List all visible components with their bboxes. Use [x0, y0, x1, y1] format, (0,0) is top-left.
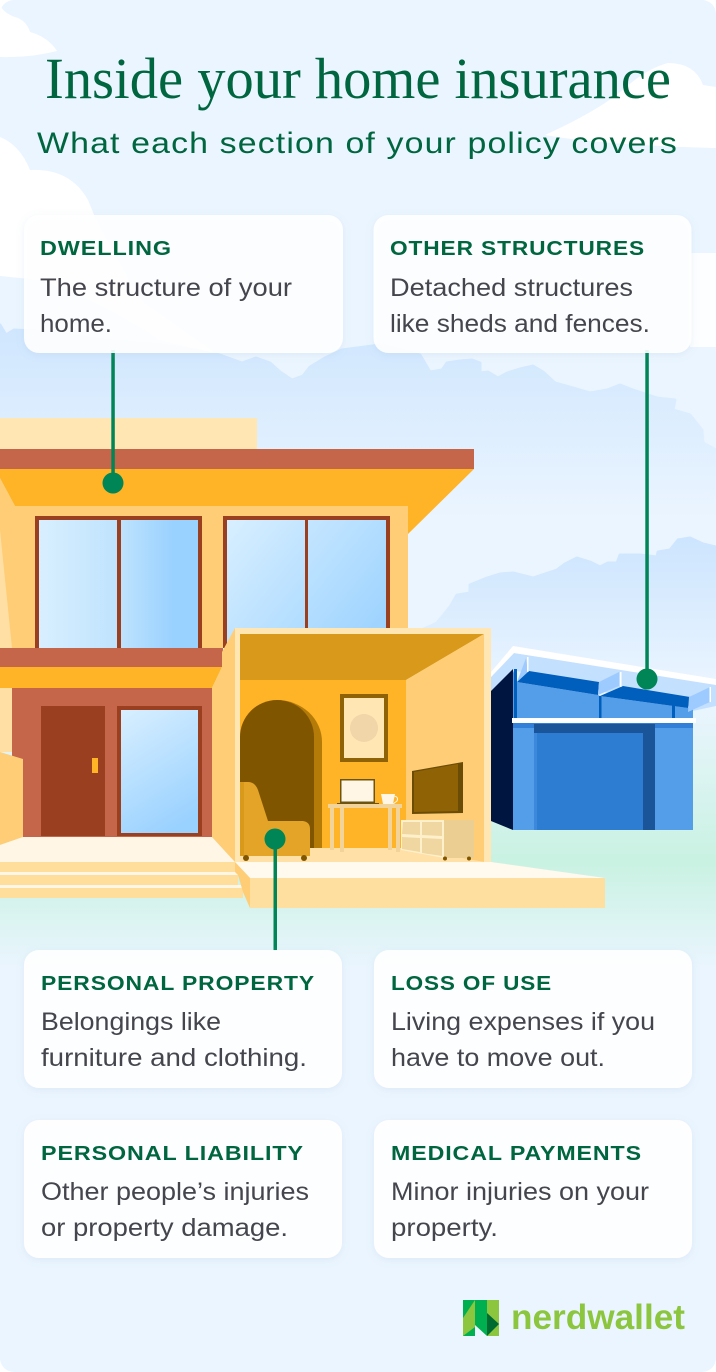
heading: other structures: OTHER STRUCTURES — [390, 237, 645, 260]
panel: personal liability — [24, 1120, 342, 1258]
cloud: far right — [690, 253, 716, 347]
cloud: top left — [0, 5, 57, 57]
television — [412, 762, 463, 814]
lower window — [117, 706, 202, 836]
left side wall upper — [0, 478, 15, 648]
upper right window — [223, 516, 390, 648]
house — [0, 418, 605, 908]
text: loss of use: have to move out. — [391, 1044, 605, 1072]
floor — [240, 848, 484, 862]
steps — [0, 862, 243, 898]
text: medical payments: property. — [391, 1214, 498, 1242]
lower wall — [12, 688, 212, 837]
panel: loss of use — [374, 950, 692, 1088]
back wall — [0, 418, 257, 449]
text: personal liability: or property damage. — [41, 1214, 288, 1242]
callout line: personal property — [264, 828, 286, 951]
table with laptop and cup — [328, 779, 402, 852]
porch — [0, 837, 235, 862]
upper left window — [35, 516, 202, 648]
cloud: right — [545, 63, 716, 148]
panel: dwelling — [24, 215, 343, 353]
text: other structures: Detached structures — [390, 274, 633, 302]
text: personal property: furniture and clothing. — [41, 1044, 307, 1072]
callout line: dwelling — [102, 350, 124, 494]
shed dark side — [491, 669, 513, 830]
ceiling — [240, 634, 484, 680]
text: personal liability: Other people’s injuries — [41, 1178, 309, 1206]
cabinet — [401, 820, 474, 860]
door — [41, 706, 105, 836]
right wall — [406, 634, 484, 862]
title: Inside your home insurance — [45, 46, 671, 111]
panel: other structures — [374, 215, 692, 353]
shed — [491, 646, 716, 830]
logo: nerdwallet — [463, 1298, 685, 1337]
room cutaway — [212, 628, 491, 862]
heading: personal liability: PERSONAL LIABILITY — [41, 1142, 304, 1165]
callout line: other structures — [636, 350, 658, 690]
subtitle: What each section of your policy covers — [37, 127, 678, 160]
icon: N mark — [463, 1300, 499, 1336]
shed eaves — [517, 658, 528, 682]
panel: personal property — [24, 950, 342, 1088]
shed lintel — [513, 723, 693, 728]
archway — [240, 700, 322, 848]
text: loss of use: Living expenses if you — [391, 1008, 655, 1036]
soffit — [0, 469, 474, 534]
text: dwelling: home. — [40, 310, 112, 338]
panel: medical payments — [374, 1120, 692, 1258]
middle band — [0, 648, 223, 667]
facade upper — [15, 506, 408, 648]
text: personal property: Belongings like — [41, 1008, 221, 1036]
text: medical payments: Minor injuries on your — [391, 1178, 649, 1206]
shed roof — [491, 653, 716, 712]
heading: dwelling: DWELLING — [40, 237, 172, 260]
text: dwelling: The structure of your — [40, 274, 292, 302]
roof band — [0, 449, 474, 469]
heading: medical payments: MEDICAL PAYMENTS — [391, 1142, 642, 1165]
text: other structures: like sheds and fences. — [390, 310, 650, 338]
foundation slab — [235, 862, 605, 908]
armchair — [240, 782, 310, 861]
shed wall — [513, 670, 693, 830]
cloud: left — [0, 137, 94, 278]
picture — [340, 694, 388, 762]
heading: personal property: PERSONAL PROPERTY — [41, 972, 315, 995]
shed door — [534, 724, 655, 830]
heading: loss of use: LOSS OF USE — [391, 972, 552, 995]
wordmark: nerdwallet — [511, 1298, 685, 1337]
